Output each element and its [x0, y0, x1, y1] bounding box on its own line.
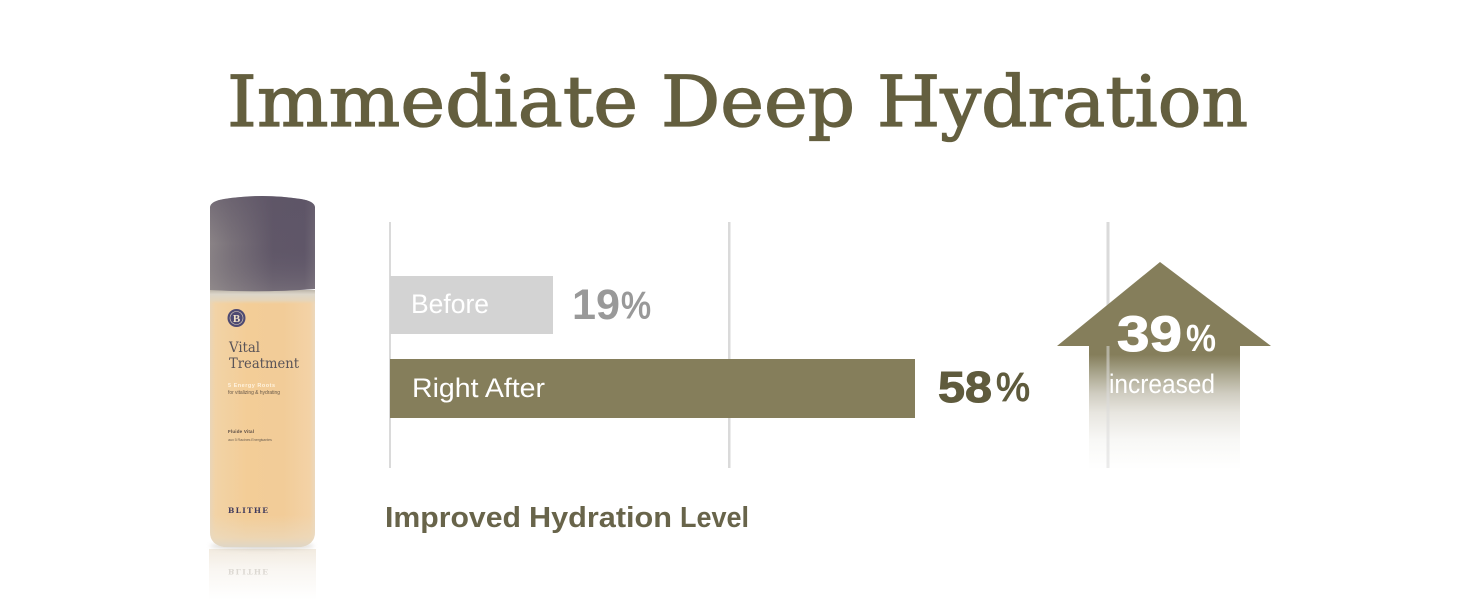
title [227, 61, 1248, 143]
bottle reflection: BLITHE [228, 567, 268, 576]
brand seal [228, 309, 246, 327]
bottle cap [210, 196, 315, 291]
brand seal: B [233, 313, 241, 325]
value: 58%: 58 [938, 363, 992, 412]
bottle ground shadow [210, 543, 314, 549]
chart caption: Hydration [529, 502, 672, 534]
increase arrow [1057, 262, 1271, 470]
title: Immediate [227, 61, 638, 143]
increased label: increased [1109, 369, 1215, 399]
value: 19%: 19 [572, 281, 620, 329]
value: 58%: % [996, 366, 1030, 410]
bottle label text: Treatment [229, 356, 300, 372]
bar: right after: Right After [412, 373, 545, 403]
product bottle: aux 5 Racines Energisantes [228, 437, 272, 442]
bar: before: Before [411, 289, 489, 319]
bottle label text: Vital [228, 340, 260, 356]
value: 58% [938, 363, 1030, 412]
product bottle: for vitalizing & hydrating [228, 390, 280, 396]
bottle label text [228, 340, 300, 372]
bar: before [390, 276, 553, 334]
bar: right after [390, 359, 915, 418]
bottle body [210, 292, 315, 547]
product bottle: Fluide Vital [228, 429, 254, 434]
chart caption [385, 502, 749, 534]
bottle reflection [209, 549, 316, 600]
product bottle [209, 196, 316, 600]
value: 19%: % [621, 285, 651, 327]
title: Deep [661, 61, 855, 143]
arrow shape [1057, 262, 1271, 470]
percent sign: % [1186, 318, 1216, 360]
title: Hydration [877, 61, 1248, 143]
product bottle: 5 Energy Roots [228, 383, 275, 389]
chart grid lines [389, 222, 1110, 468]
chart caption: Level [680, 502, 749, 534]
value: 19% [572, 281, 651, 329]
product bottle: BLITHE [228, 506, 268, 515]
value: 39%: 39 [1117, 306, 1182, 362]
chart caption: Improved [385, 502, 521, 534]
